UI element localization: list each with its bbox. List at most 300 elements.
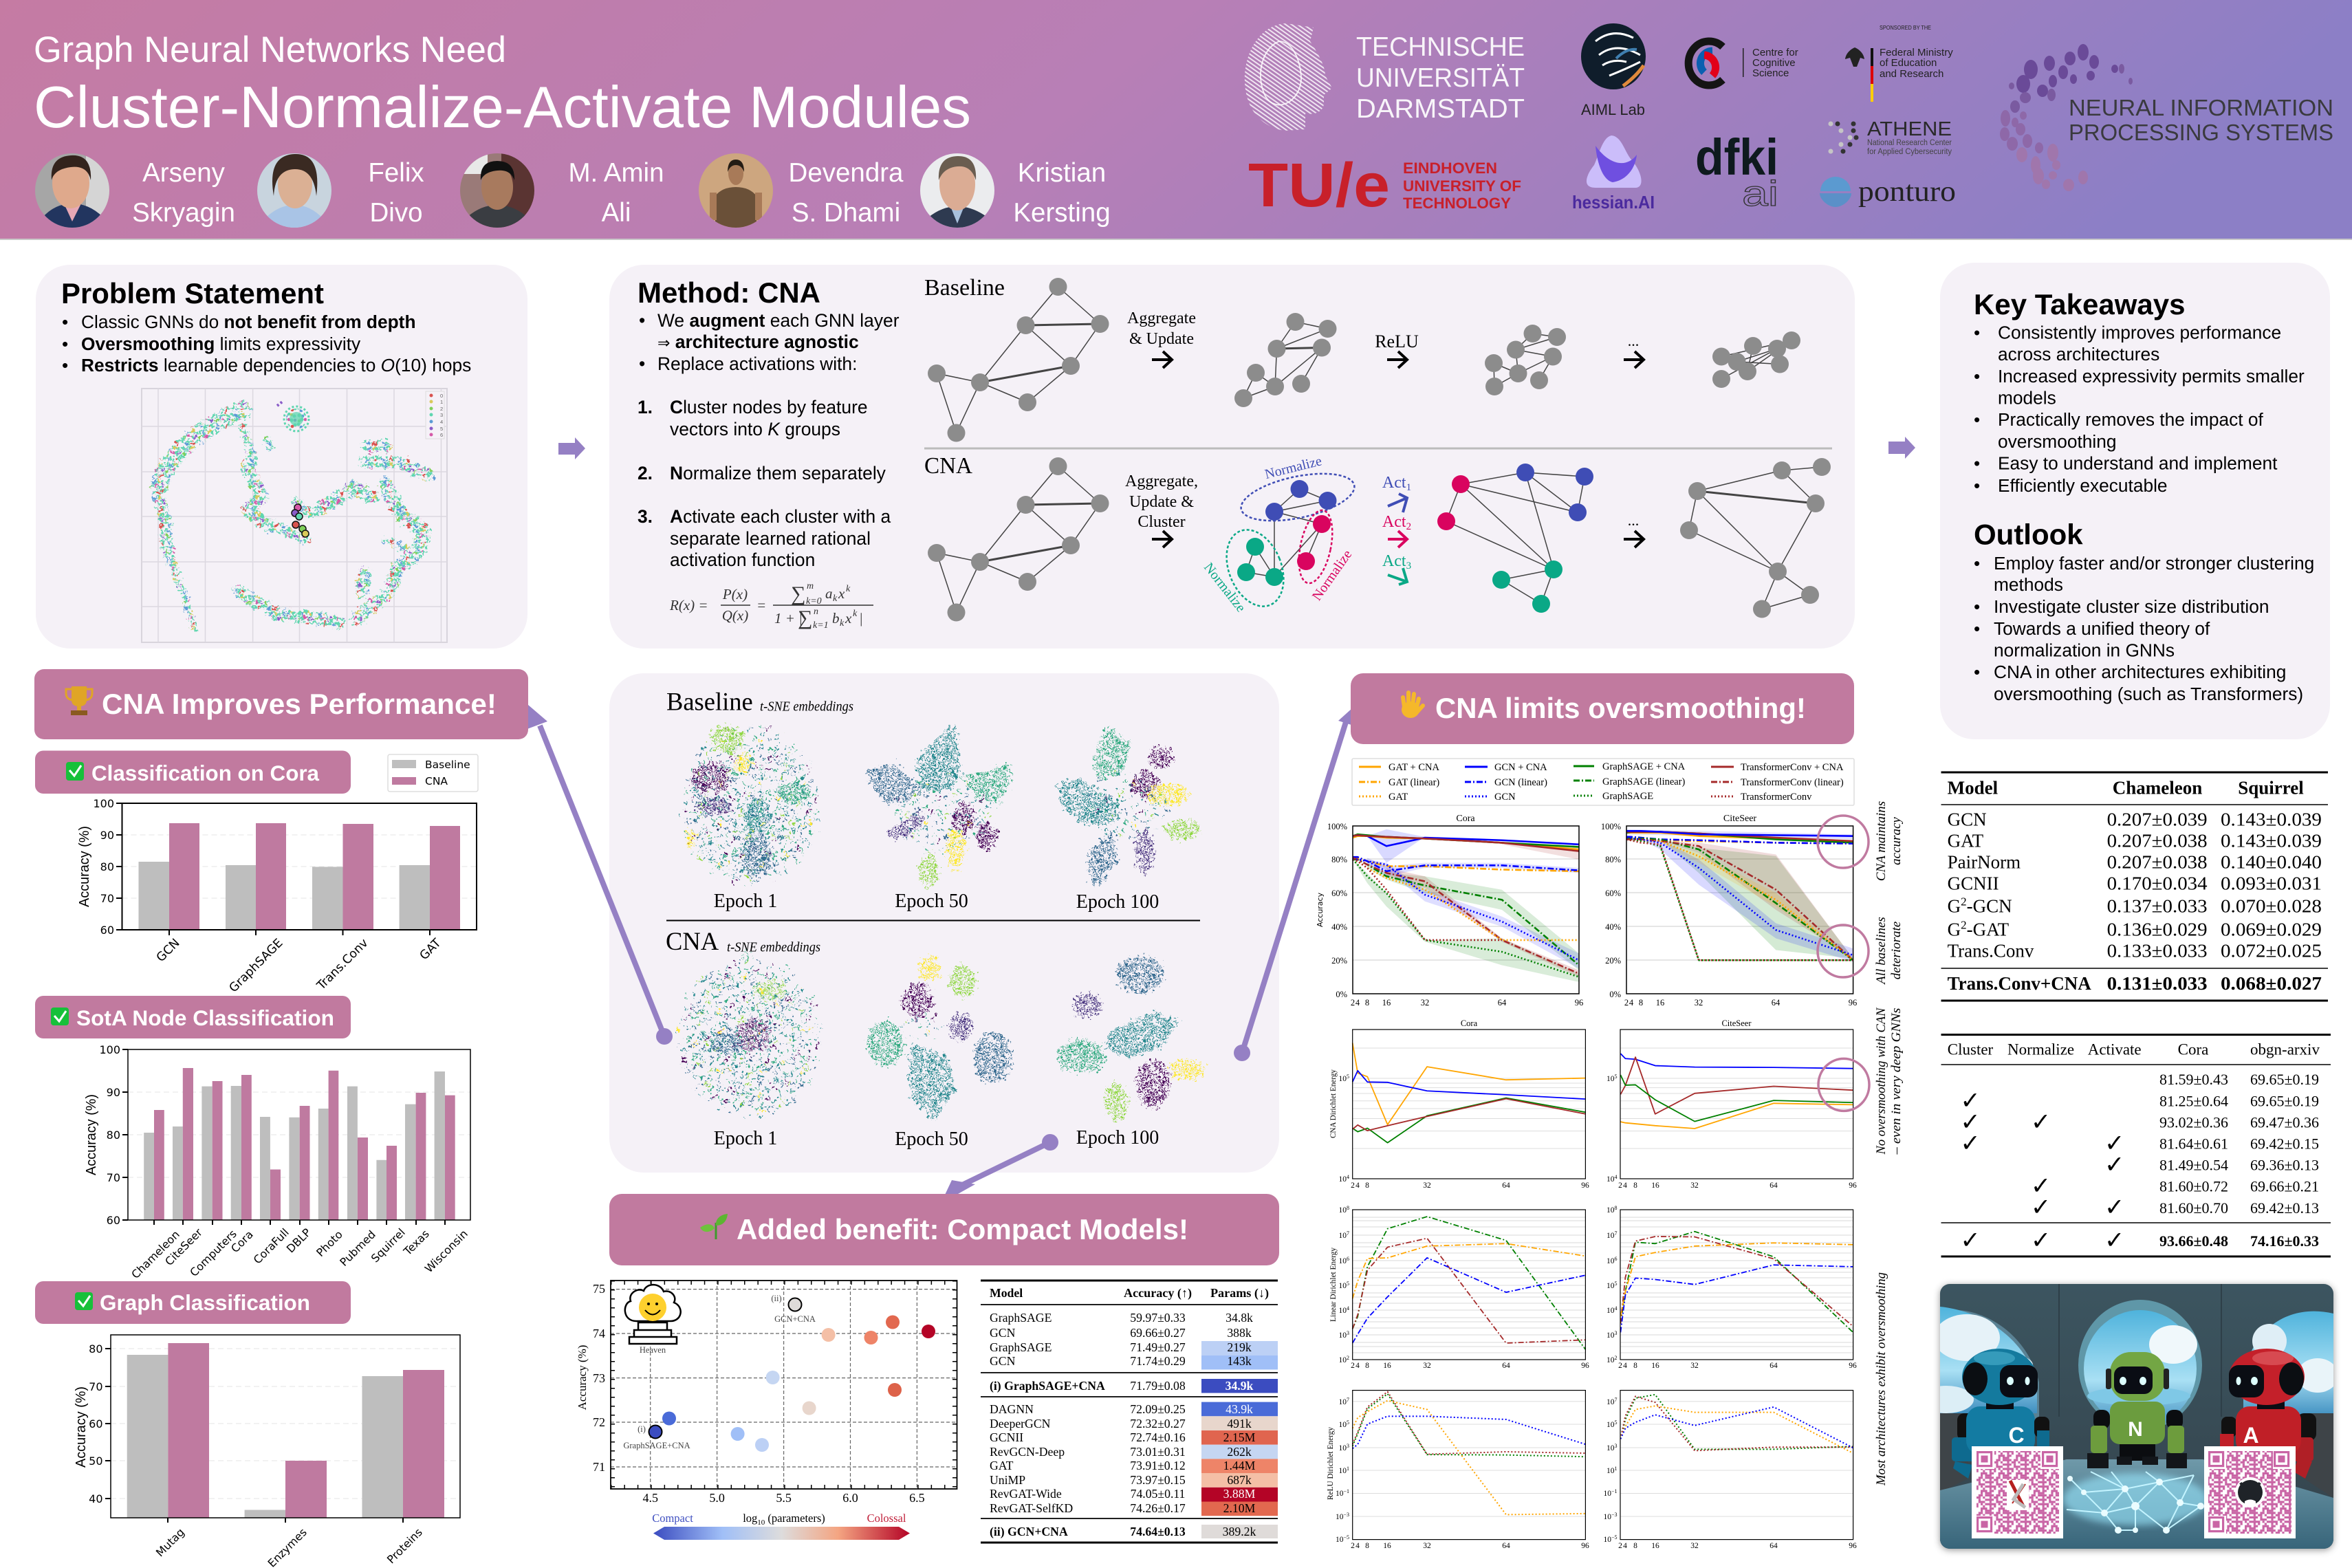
method steps text: 1. [638, 397, 653, 417]
line chart: ReLU Dirichlet energy: 8 [1633, 1542, 1637, 1550]
banner: Graph Classification [35, 1281, 351, 1324]
arrow: repeat layers baseline: ... [1628, 332, 1639, 349]
formula: rational activation: b [832, 610, 839, 627]
table: ablation of cluster normalize activate: ✓ [2104, 1151, 2124, 1179]
line chart: ReLU Dirichlet energy: 16 [1651, 1542, 1659, 1550]
line chart: linear Dirichlet energy: 10 [1607, 1356, 1615, 1364]
side annotations: – even in very deep GNNs [1889, 1008, 1904, 1155]
table: heterophily scores: 0.207±0.038 [2107, 831, 2208, 851]
line chart: linear Dirichlet energy: 10 [1338, 1206, 1347, 1215]
bar chart: classification on Cora: 60 [100, 924, 114, 937]
line chart: linear Dirichlet energy: 4 [1615, 1305, 1618, 1311]
table: compact models: 3.88M [1223, 1487, 1256, 1501]
bar chart: SotA node classification [84, 1043, 470, 1281]
table: compact models: GraphSAGE [990, 1311, 1052, 1325]
panel: t-SNE embeddings [609, 673, 1279, 1173]
line chart: ReLU Dirichlet energy: 8 [1365, 1542, 1369, 1550]
table: heterophily scores [1941, 772, 2328, 1001]
arrow: ReLU [1387, 351, 1407, 368]
line chart: linear Dirichlet energy: 96 [1849, 1362, 1857, 1370]
line chart: accuracy on Cora: 80% [1331, 855, 1347, 864]
banner: SotA Node Classification: SotA Node Classification [76, 1005, 334, 1030]
table: ablation of cluster normalize activate: 69.65±0.19 [2250, 1071, 2319, 1088]
graph: CNA output [1680, 458, 1831, 618]
line chart: linear Dirichlet energy: 16 [1651, 1362, 1659, 1370]
banner: SotA Node Classification [35, 996, 351, 1038]
line chart: CNA Dirichlet energy: 8 [1633, 1182, 1637, 1190]
bar chart: SotA node classification: Texas [400, 1227, 432, 1259]
takeaways list: Efficiently executable [1998, 475, 2168, 496]
line chart: linear Dirichlet energy: 3 [1615, 1330, 1618, 1336]
logo: Federal Ministry of Education and Research: and Research [1880, 68, 1943, 80]
table: heterophily scores: 0.070±0.028 [2221, 895, 2322, 916]
formula: rational activation: x [838, 585, 845, 602]
logo: TU Darmstadt [1245, 23, 1525, 131]
line chart: ReLU Dirichlet energy: −1 [1611, 1488, 1618, 1494]
heading: Baseline t-SNE [666, 688, 853, 716]
table: compact models: RevGAT-SelfKD [990, 1501, 1073, 1515]
line chart: ReLU Dirichlet energy: 5 [1347, 1419, 1349, 1426]
method steps text: • [639, 310, 645, 331]
author: Devendra S. Dhami [699, 153, 904, 228]
table: compact models: GAT [990, 1459, 1014, 1472]
line chart: linear Dirichlet energy: 10 [1607, 1232, 1615, 1240]
line chart: linear Dirichlet energy: 6 [1615, 1256, 1618, 1262]
line chart: ReLU Dirichlet energy: 4 [1355, 1542, 1360, 1550]
line chart: ReLU Dirichlet energy: 10 [1607, 1444, 1615, 1452]
scatter chart: accuracy vs parameters: 6.5 [909, 1491, 925, 1505]
bar chart: SotA node classification: 60 [107, 1214, 120, 1227]
table: heterophily scores: 0.136±0.029 [2107, 919, 2208, 939]
table: compact models: 71.79±0.08 [1130, 1379, 1186, 1393]
line chart: linear Dirichlet energy: 8 [1365, 1362, 1369, 1370]
line chart: CNA Dirichlet energy: 32 [1423, 1182, 1431, 1190]
bar chart: classification on Cora: GAT [417, 936, 444, 963]
logo: Centre for Cognitive Science [1688, 41, 1798, 85]
banner: CNA Improves Performance: CNA Improves Performance! [102, 688, 497, 720]
side annotations: CNA maintains [1874, 801, 1888, 881]
heading: Outlook: Outlook [1974, 519, 2083, 551]
header banner [0, 0, 2352, 240]
table: heterophily scores: 0.137±0.033 [2107, 895, 2208, 916]
takeaways list: • [1974, 409, 1980, 430]
label and arrow: Act2: Act [1382, 513, 1406, 531]
line chart: linear Dirichlet energy: 10 [1607, 1206, 1615, 1215]
icon: sprout [700, 1214, 728, 1239]
bar chart: classification on Cora: Accuracy (%) [77, 826, 92, 907]
author: Felix Divo: Felix [368, 158, 424, 188]
table: heterophily scores: 0.093±0.031 [2221, 873, 2322, 894]
formula: rational activation: ∑ [791, 582, 805, 605]
line chart: accuracy on CiteSeer: 40% [1605, 922, 1621, 932]
line chart: ReLU Dirichlet energy: 4 [1623, 1542, 1627, 1550]
bar chart: SotA node classification: CiteSeer [162, 1226, 205, 1268]
line chart: accuracy on CiteSeer: 20% [1605, 956, 1621, 966]
banner: Added benefit Compact Models [609, 1194, 1279, 1265]
takeaways list: Practically removes the impact of [1998, 409, 2264, 430]
arrow: cluster [1152, 531, 1172, 547]
table: compact models: 71.49±0.27 [1130, 1340, 1186, 1354]
table: compact models: Model [990, 1286, 1023, 1300]
table: compact models: (ii) GCN+CNA [990, 1525, 1068, 1538]
heading: Baseline t-SNE: t-SNE embeddings [760, 700, 853, 714]
legend: line styles: GCN + CNA [1494, 762, 1547, 773]
table: compact models: 389.2k [1223, 1525, 1256, 1538]
logo: ponturo [1820, 176, 1956, 208]
method steps text: We augment each GNN layer [657, 310, 900, 331]
outlook list: Employ faster and/or stronger clustering [1994, 553, 2314, 574]
bar chart: graph classification: Accuracy (%) [74, 1386, 89, 1468]
table: ablation of cluster normalize activate: 81.25±0.64 [2159, 1093, 2228, 1110]
chart: oversmoothed node embeddings: 3 [440, 412, 443, 418]
label: Aggregate, Update & Cluster: Aggregate, [1125, 472, 1198, 490]
outlook list: oversmoothing (such as Transformers) [1994, 684, 2303, 704]
robot C [1952, 1349, 2049, 1479]
table: compact models: 43.9k [1226, 1402, 1253, 1416]
line chart: ReLU Dirichlet energy: 7 [1615, 1397, 1618, 1403]
line chart: accuracy on Cora: 100% [1327, 822, 1347, 831]
label: Aggregate & Update [1127, 309, 1196, 348]
line chart: linear Dirichlet energy: 64 [1770, 1362, 1778, 1370]
table: ablation of cluster normalize activate: Cluster [1948, 1041, 1994, 1058]
line chart: ReLU Dirichlet energy: 2 [1351, 1542, 1355, 1550]
line chart: ReLU Dirichlet energy [1325, 1391, 1857, 1550]
problem bullets: • [62, 312, 68, 332]
legend: line styles: TransformerConv + CNA [1741, 762, 1844, 773]
line chart: ReLU Dirichlet energy: −3 [1343, 1512, 1349, 1518]
legend: line styles: GAT [1389, 792, 1408, 803]
outlook list: • [1974, 618, 1980, 639]
table: heterophily scores: 0.143±0.039 [2221, 809, 2322, 829]
table: compact models: 687k [1227, 1473, 1252, 1487]
table: heterophily scores: 0.072±0.025 [2221, 941, 2322, 961]
logo: TU/e: TECHNOLOGY [1403, 195, 1511, 212]
formula: rational activation: a [825, 585, 832, 602]
robot A [2220, 1349, 2316, 1479]
scatter: baseline epoch 100 [1057, 725, 1201, 885]
side annotations: deteriorate [1889, 922, 1904, 979]
line chart: CNA Dirichlet energy: 64 [1770, 1182, 1778, 1190]
scatter chart: accuracy vs parameters: 6.0 [842, 1491, 858, 1505]
line chart: accuracy on Cora: 40% [1331, 922, 1347, 932]
table: heterophily scores: 2 [1961, 919, 1967, 931]
line chart: linear Dirichlet energy: 2 [1615, 1355, 1618, 1361]
author: M. Amin Ali: M. Amin [568, 158, 664, 188]
method steps text: vectors into K groups [670, 419, 840, 439]
banner: CNA limits oversmoothing [1351, 673, 1854, 744]
table: ablation of cluster normalize activate: Normalize [2007, 1041, 2074, 1058]
line chart: ReLU Dirichlet energy: 10 [1603, 1490, 1611, 1498]
colorbar: parameter count: log [743, 1512, 757, 1525]
icon: raised hand [1402, 693, 1423, 718]
icon: check box [75, 1292, 93, 1310]
panel: key takeaways and outlook [1940, 263, 2330, 739]
table: ablation of cluster normalize activate: 81.60±0.72 [2159, 1178, 2228, 1195]
line chart: linear Dirichlet energy: 64 [1502, 1362, 1510, 1370]
logo: TU Darmstadt: TECHNISCHE [1356, 32, 1525, 62]
line chart: CNA Dirichlet energy: 5 [1615, 1074, 1618, 1080]
table: compact models: 1.44M [1223, 1459, 1256, 1472]
table: compact models: 262k [1227, 1445, 1252, 1459]
arrow: aggregate [1152, 351, 1172, 368]
line chart: CNA Dirichlet energy: 10 [1338, 1175, 1347, 1184]
heading: Baseline t-SNE: Baseline [666, 688, 753, 716]
line chart: ReLU Dirichlet energy: 2 [1618, 1542, 1622, 1550]
scatter chart: accuracy vs parameters: Heaven [640, 1345, 666, 1355]
panel: Method CNA [609, 265, 1855, 649]
formula: rational activation: x [845, 610, 852, 627]
label: CNA: CNA [924, 453, 972, 479]
line chart: linear Dirichlet energy: 10 [1338, 1307, 1347, 1315]
table: compact models: Accuracy (↑) [1124, 1286, 1192, 1300]
line chart: ReLU Dirichlet energy: 64 [1502, 1542, 1510, 1550]
table: heterophily scores: PairNorm [1948, 851, 2021, 872]
problem bullets [62, 312, 471, 375]
table: heterophily scores: GCNII [1948, 873, 1999, 894]
line chart: accuracy on CiteSeer: 96 [1849, 998, 1857, 1008]
line chart: linear Dirichlet energy: 6 [1347, 1256, 1349, 1262]
epoch labels baseline: Epoch 1 [714, 891, 777, 912]
label: Aggregate & Update: Aggregate [1127, 309, 1196, 327]
line chart: ReLU Dirichlet energy: 64 [1770, 1542, 1778, 1550]
table: compact models: 2.15M [1223, 1430, 1256, 1444]
line chart: CNA Dirichlet energy: CNA Dirichlet Energy [1328, 1069, 1338, 1138]
line chart: ReLU Dirichlet energy: 10 [1338, 1398, 1347, 1406]
table: compact models: 388k [1227, 1326, 1252, 1340]
line chart: ReLU Dirichlet energy: 10 [1603, 1536, 1611, 1544]
takeaways list: • [1974, 453, 1980, 474]
line chart: ReLU Dirichlet energy: 10 [1607, 1398, 1615, 1406]
chart: oversmoothed node embeddings: 5 [440, 426, 443, 432]
line chart: linear Dirichlet energy: 16 [1383, 1362, 1391, 1370]
line chart: linear Dirichlet energy: 10 [1338, 1331, 1347, 1340]
line chart: ReLU Dirichlet energy: 10 [1338, 1444, 1347, 1452]
banner: Classification on Cora: Classification on Cora [91, 761, 319, 785]
author: Kristian Kersting: Kristian [1018, 158, 1106, 188]
scatter chart: accuracy vs parameters: Accuracy (%) [576, 1345, 589, 1410]
table: heterophily scores: Trans.Conv [1948, 941, 2034, 961]
table: heterophily scores: 0.140±0.040 [2221, 851, 2322, 872]
QR code: GitHub [2204, 1446, 2296, 1538]
banner: Added benefit Compact Models: Added benefit: Compact Models! [737, 1213, 1188, 1245]
scatter chart: accuracy vs parameters: 5.5 [776, 1491, 792, 1505]
graph: after ReLU [1485, 325, 1566, 395]
line chart: accuracy on CiteSeer: 16 [1656, 998, 1664, 1008]
arrow: method to takeaways [1888, 437, 1915, 459]
takeaways list: • [1974, 366, 1980, 386]
author: M. Amin Ali [460, 153, 664, 228]
graph: clustered nodes [1201, 453, 1358, 615]
table: ablation of cluster normalize activate: 81.60±0.70 [2159, 1199, 2228, 1217]
logo: ATHENE: ATHENE [1867, 118, 1952, 140]
logo: dfki: dfki [1695, 129, 1778, 186]
chart: oversmoothed node embeddings: 4 [440, 419, 443, 425]
line chart: CNA Dirichlet energy: 4 [1623, 1182, 1627, 1190]
scatter: CNA epoch 50 [868, 956, 1012, 1119]
formula: rational activation: = [756, 597, 766, 613]
label and arrow: Act3 [1382, 552, 1411, 585]
logo: Federal Ministry of Education and Research: SPONSORED BY THE [1880, 24, 1931, 31]
table: heterophily scores: 0.170±0.034 [2107, 873, 2208, 894]
line chart: linear Dirichlet energy: 8 [1347, 1205, 1349, 1211]
robot A: A [2243, 1423, 2259, 1448]
method steps text: Cluster nodes by feature [670, 397, 868, 417]
table: compact models: 73.01±0.31 [1130, 1445, 1186, 1459]
label: Aggregate, Update & Cluster [1125, 472, 1198, 531]
formula: rational activation: k [840, 618, 845, 629]
robot N [2087, 1352, 2187, 1468]
scatter: baseline epoch 1 [679, 725, 820, 886]
legend: line styles: GraphSAGE [1602, 791, 1653, 802]
scatter chart: accuracy vs parameters: GCN+CNA [774, 1314, 816, 1324]
author: Kristian Kersting: Kersting [1013, 198, 1111, 228]
logo: dfki [1695, 129, 1778, 214]
line chart: accuracy on CiteSeer: 32 [1695, 998, 1703, 1008]
scatter: CNA epoch 1 [677, 952, 822, 1118]
scatter chart: accuracy vs parameters: 73 [593, 1371, 605, 1385]
scatter chart: accuracy vs parameters: 75 [593, 1282, 605, 1296]
line chart: linear Dirichlet energy: 4 [1623, 1362, 1627, 1370]
label and arrow: Act2: 2 [1406, 521, 1411, 532]
scatter chart: accuracy vs parameters: 71 [593, 1460, 605, 1474]
arrow: t-SNE to oversmoothing banner [1234, 708, 1353, 1061]
table: heterophily scores: GCN [1948, 809, 1987, 829]
label: Baseline: Baseline [924, 275, 1005, 301]
table: ablation of cluster normalize activate: 81.59±0.43 [2159, 1071, 2228, 1088]
line chart: linear Dirichlet energy: 5 [1615, 1281, 1618, 1287]
label: Aggregate, Update & Cluster: Cluster [1137, 513, 1186, 531]
line chart: CNA Dirichlet energy: 5 [1347, 1074, 1349, 1080]
line chart: accuracy on CiteSeer: 8 [1639, 998, 1643, 1008]
line chart: linear Dirichlet energy: 10 [1607, 1282, 1615, 1290]
heading: CNA t-SNE [666, 927, 820, 955]
method steps text: 3. [638, 506, 653, 527]
line chart: linear Dirichlet energy: 32 [1423, 1362, 1431, 1370]
line chart: CNA Dirichlet energy: 10 [1607, 1175, 1615, 1184]
formula: rational activation [669, 581, 873, 631]
label: Aggregate & Update: & Update [1129, 330, 1194, 348]
table: heterophily scores: GAT [1948, 831, 1984, 851]
line chart: linear Dirichlet energy: 2 [1618, 1362, 1622, 1370]
icon: trophy [66, 686, 92, 715]
title: Cluster-Normalize-Activate Modules [34, 75, 971, 140]
illustration: C N A robots with QR codes [1919, 1284, 2338, 1550]
bar chart: SotA node classification: CoraFull [251, 1226, 292, 1267]
table: heterophily scores: -GCN [1967, 895, 2012, 916]
logo: TU/e: UNIVERSITY OF [1403, 177, 1521, 195]
line chart: linear Dirichlet energy: 8 [1615, 1205, 1618, 1211]
side annotations: All baselines [1874, 917, 1888, 986]
bar chart: SotA node classification: Squirrel [369, 1226, 408, 1265]
formula: rational activation: Q(x) [722, 607, 748, 624]
line chart: ReLU Dirichlet energy: −5 [1611, 1534, 1618, 1540]
graph: activated clusters [1437, 464, 1593, 613]
line chart: linear Dirichlet energy: 2 [1347, 1355, 1349, 1361]
line chart: accuracy on Cora: 2 [1351, 998, 1355, 1008]
scatter chart: accuracy vs parameters [576, 1281, 957, 1505]
table: ablation of cluster normalize activate: ✓ [2031, 1109, 2051, 1136]
bar chart: SotA node classification: Cora [228, 1228, 256, 1255]
formula: rational activation: ∑ [798, 607, 812, 629]
line chart: accuracy on CiteSeer: CiteSeer [1723, 814, 1756, 824]
line chart: ReLU Dirichlet energy: 10 [1607, 1467, 1615, 1475]
logo: TU/e: TU/e [1248, 151, 1390, 220]
legend: baseline vs CNA: Baseline [425, 759, 470, 771]
table: ablation of cluster normalize activate: 69.42±0.15 [2250, 1135, 2319, 1153]
table: compact models: 72.74±0.16 [1130, 1430, 1186, 1444]
bar chart: graph classification: Proteins [384, 1525, 425, 1566]
line chart: accuracy on CiteSeer: 100% [1601, 822, 1621, 831]
logo: Federal Ministry of Education and Research: Federal Ministry [1880, 47, 1953, 58]
author: Felix Divo [257, 153, 424, 228]
formula: rational activation: P(x) [722, 586, 748, 602]
arrow: t-SNE to performance banner [525, 705, 673, 1045]
side annotations: Most architectures exhibit oversmoothing [1874, 1272, 1888, 1486]
colorbar: parameter count: (parameters) [765, 1512, 825, 1525]
bar chart: graph classification: Mutag [153, 1525, 187, 1559]
scatter: baseline epoch 50 [868, 725, 1011, 888]
scatter chart: accuracy vs parameters: GraphSAGE+CNA [623, 1441, 690, 1450]
table: ablation of cluster normalize activate: ✓ [1960, 1109, 1981, 1136]
line chart: CNA Dirichlet energy: 4 [1347, 1174, 1349, 1180]
line chart: linear Dirichlet energy: 10 [1607, 1307, 1615, 1315]
legend: line styles: GCN [1494, 792, 1516, 803]
table: compact models: 491k [1227, 1417, 1252, 1430]
method steps text: Normalize them separately [670, 463, 886, 483]
takeaways list: oversmoothing [1998, 431, 2116, 452]
legend: line styles: GCN (linear) [1494, 777, 1547, 788]
line chart: accuracy on Cora [1316, 814, 1583, 1008]
table: compact models: 74.05±0.11 [1131, 1487, 1185, 1501]
outlook list: • [1974, 553, 1980, 574]
banner: Graph Classification: Graph Classification [100, 1290, 310, 1315]
arrow: t-SNE to compact models banner [941, 1134, 1058, 1204]
bar chart: classification on Cora: 70 [100, 892, 114, 905]
line chart: ReLU Dirichlet energy: 5 [1615, 1419, 1618, 1426]
legend: line styles [1352, 759, 1854, 805]
author: M. Amin Ali: Ali [602, 198, 631, 228]
line chart: accuracy on CiteSeer: 0% [1609, 990, 1621, 999]
table: compact models: GCNII [990, 1430, 1023, 1444]
line chart: linear Dirichlet energy: 8 [1633, 1362, 1637, 1370]
heading: CNA t-SNE: t-SNE embeddings [727, 941, 820, 955]
takeaways list: • [1974, 322, 1980, 342]
epoch labels CNA: Epoch 50 [895, 1129, 968, 1150]
line chart: CNA Dirichlet energy: 16 [1651, 1182, 1659, 1190]
bar chart: SotA node classification: Computers [187, 1227, 239, 1279]
table: ablation of cluster normalize activate: 69.42±0.13 [2250, 1199, 2319, 1217]
table: compact models: 73.97±0.15 [1130, 1473, 1186, 1487]
line chart: ReLU Dirichlet energy: 10 [1338, 1421, 1347, 1429]
table: compact models: 2.10M [1223, 1501, 1256, 1515]
banner: CNA Improves Performance [34, 669, 528, 739]
author: Arseny Skryagin: Arseny [142, 158, 226, 188]
method steps text: activation function [670, 549, 815, 570]
logo: hessian.AI: hessian.AI [1572, 192, 1655, 213]
logo: dfki: ai [1742, 174, 1778, 214]
author: Felix Divo: Divo [369, 198, 423, 228]
line chart: CNA Dirichlet energy: 10 [1338, 1075, 1347, 1083]
icon: heaven cloud with smiley and stairs [625, 1285, 681, 1344]
bar chart: SotA node classification: Chameleon [129, 1228, 182, 1281]
table: ablation of cluster normalize activate: 93.02±0.36 [2159, 1114, 2228, 1131]
colorbar: parameter count: 10 [757, 1518, 765, 1527]
label and arrow: Act3: 3 [1406, 560, 1411, 571]
formula: rational activation: n [814, 607, 818, 617]
side annotations: accuracy [1889, 817, 1904, 865]
table: compact models: 59.97±0.33 [1130, 1311, 1186, 1325]
takeaways list: Easy to understand and implement [1998, 453, 2278, 474]
